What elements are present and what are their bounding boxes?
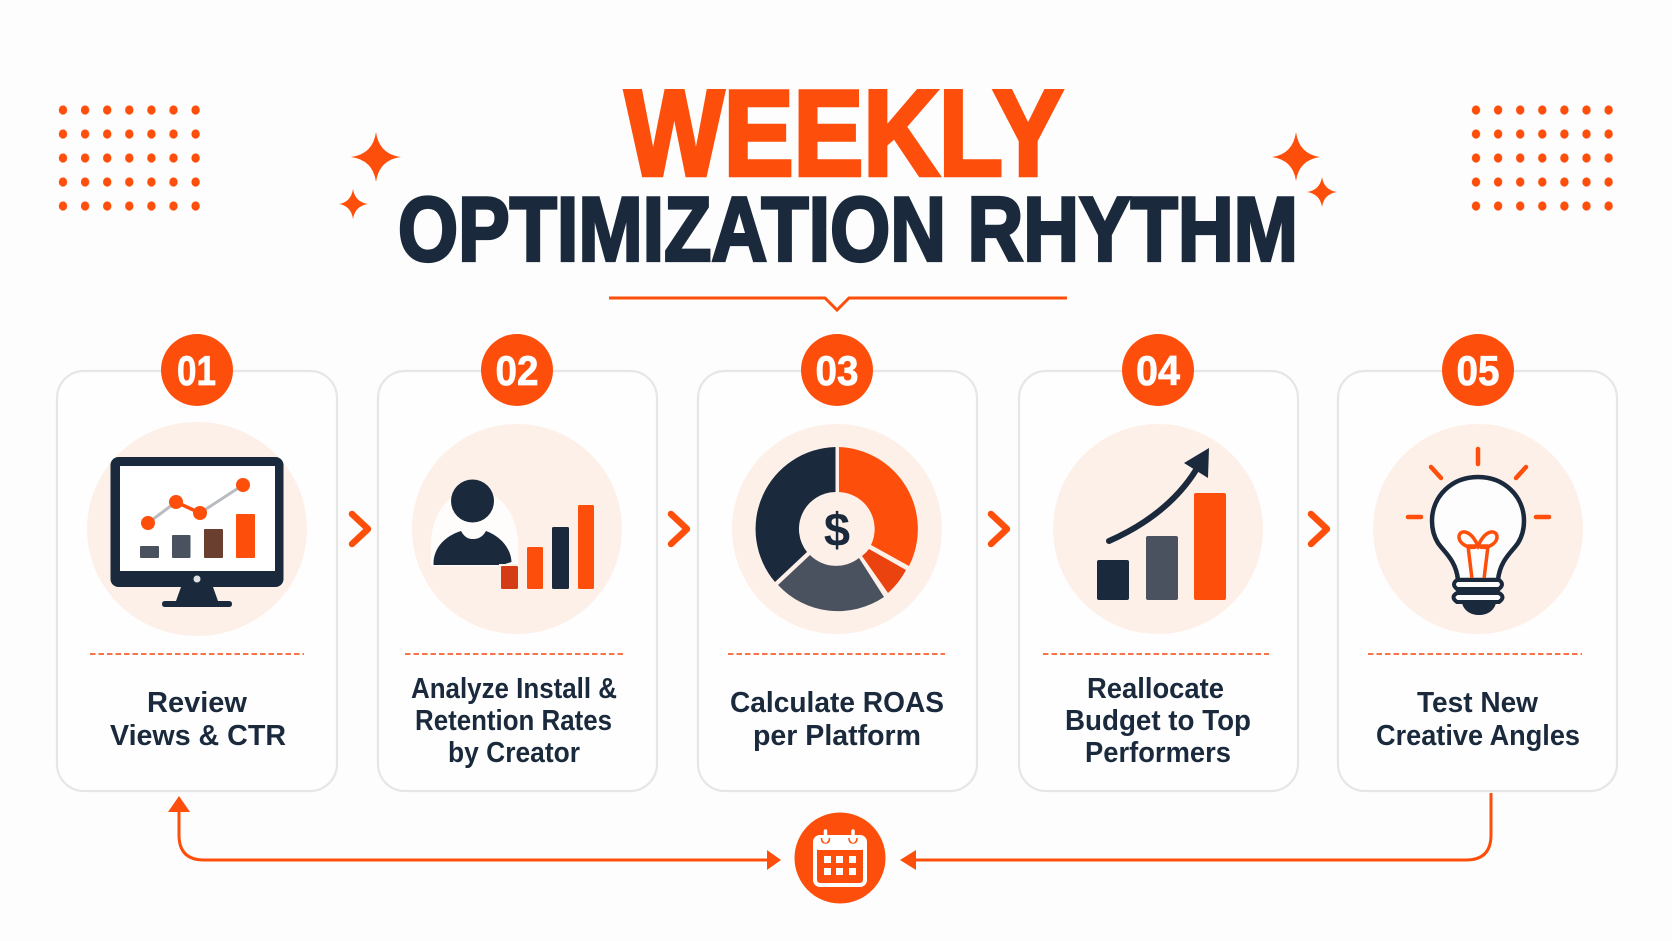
caption	[411, 673, 617, 769]
sparkles: left	[339, 132, 401, 219]
icon: rising bars with arrow	[1053, 424, 1263, 634]
icon: monitor with chart	[87, 422, 307, 636]
title	[398, 65, 1298, 280]
icon: donut chart with dollar	[732, 424, 942, 634]
arrow: loop back to step 1	[168, 796, 781, 870]
panel: step 3	[698, 334, 977, 791]
caption	[1376, 687, 1580, 752]
badge 04	[1122, 334, 1194, 406]
badge 02: 02	[496, 347, 538, 394]
caption: Retention Rates	[415, 705, 612, 737]
badge 04: 04	[1136, 347, 1181, 394]
caption: by Creator	[448, 737, 580, 769]
caption: Review	[147, 687, 247, 719]
title underline with notch	[609, 298, 1067, 310]
arrow: step 3 to 4	[991, 514, 1007, 544]
panel: step 4	[1019, 334, 1298, 791]
title line: OPTIMIZATION RHYTHM: OPTIMIZATION RHYTHM	[398, 180, 1298, 280]
dot grid: top right	[1465, 98, 1620, 218]
caption	[730, 687, 944, 752]
arrow: step 2 to 3	[671, 514, 687, 544]
caption: Analyze Install &	[411, 673, 617, 705]
caption: Performers	[1085, 737, 1231, 769]
badge 05	[1442, 334, 1514, 406]
caption: Reallocate	[1087, 673, 1224, 705]
caption: per Platform	[753, 720, 921, 752]
dot grid: top left	[52, 98, 207, 218]
panel: step 2	[378, 334, 657, 791]
icon: creator with bars	[412, 424, 622, 634]
icon: light bulb	[1373, 424, 1583, 634]
caption	[110, 687, 286, 752]
badge 03	[801, 334, 873, 406]
caption	[1065, 673, 1251, 769]
icon: donut chart with dollar: $	[824, 503, 850, 556]
panel: step 5	[1338, 334, 1617, 791]
arrow: step 1 to 2	[352, 514, 368, 544]
icon: calendar	[794, 812, 886, 904]
caption: Test New	[1417, 687, 1538, 719]
sparkles: right	[1272, 132, 1337, 207]
panel: step 1	[57, 334, 337, 791]
badge 01: 01	[177, 347, 216, 394]
badge 02	[481, 334, 553, 406]
caption: Views & CTR	[110, 720, 286, 752]
badge 01	[161, 334, 233, 406]
caption: Budget to Top	[1065, 705, 1251, 737]
title line: WEEKLY: WEEKLY	[625, 65, 1063, 201]
arrow: step 4 to 5	[1311, 514, 1327, 544]
caption: Calculate ROAS	[730, 687, 944, 719]
badge 05: 05	[1456, 347, 1500, 394]
badge 03: 03	[816, 347, 858, 394]
caption: Creative Angles	[1376, 720, 1580, 752]
arrow: step 5 to calendar	[900, 793, 1491, 870]
